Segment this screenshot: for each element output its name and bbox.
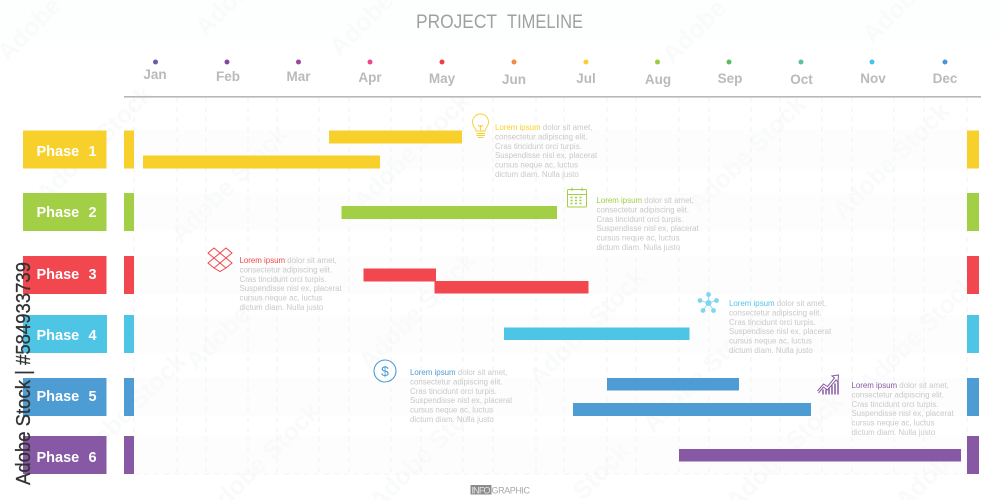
text: Adobe Stock xyxy=(180,247,308,375)
phase 2 row xyxy=(23,193,979,231)
text: Adobe Stock xyxy=(347,87,475,215)
text: phase 6 note: Lorem ipsum xyxy=(852,381,898,390)
phase 2 row: Phase xyxy=(36,205,79,221)
text: Adobe Stock xyxy=(683,90,811,218)
text: Adobe Stock xyxy=(30,80,158,208)
text: phase 6 note: Cras tincidunt orci turpis. xyxy=(852,400,938,409)
title xyxy=(416,12,583,33)
text: Adobe Stock xyxy=(853,270,981,398)
icon: light bulb xyxy=(472,114,488,138)
text: Adobe Stock xyxy=(353,247,481,375)
text: phase 3 note: cursus neque ac, luctus xyxy=(240,294,322,303)
month header xyxy=(143,60,958,87)
text: phase 6 note: Suspendisse nisl ex, placerat xyxy=(852,409,955,418)
text: phase 4 note: dolor sit amet, xyxy=(775,299,826,308)
text: phase 6 note: cursus neque ac, luctus xyxy=(852,419,934,428)
text: Adobe Stock xyxy=(63,347,191,475)
title: TIMELINE xyxy=(507,12,583,33)
text: phase 1 note: cursus neque ac, luctus xyxy=(495,161,578,170)
text: phase 3 note: Cras tincidunt orci turpis. xyxy=(240,275,326,284)
text: phase 5 note: Suspendisse nisl ex, placerat xyxy=(410,396,513,405)
month header: Nov xyxy=(860,71,886,86)
stock id vertical text: Adobe Stock | #584933739 xyxy=(13,262,35,485)
month header: May xyxy=(429,71,456,86)
text: phase 6 note: dolor sit amet, xyxy=(897,381,949,390)
phase 3 row xyxy=(23,256,979,294)
month header: Jan xyxy=(143,67,167,82)
icon: dollar coin xyxy=(374,360,396,382)
icon: growth chart xyxy=(818,375,838,394)
phase 6 row: Phase xyxy=(36,450,79,466)
footer logo xyxy=(470,485,530,496)
text: phase 4 note: Suspendisse nisl ex, placerat xyxy=(729,327,832,336)
text: phase 3 note: dolor sit amet, xyxy=(285,256,337,265)
icon: network xyxy=(698,292,718,312)
text: phase 2 note: dolor sit amet, xyxy=(642,196,694,205)
text: phase 3 note: Suspendisse nisl ex, placerat xyxy=(240,284,343,293)
text: phase 1 note: dolor sit amet, xyxy=(541,123,592,132)
text: Adobe Stock xyxy=(523,263,651,391)
phase 2 row: 2 xyxy=(88,205,97,221)
text: Adobe Stock xyxy=(637,310,765,438)
text: phase 5 note: dolor sit amet, xyxy=(456,368,507,377)
month header: Dec xyxy=(933,71,958,86)
text: phase 5 note: cursus neque ac, luctus xyxy=(410,406,493,415)
text: phase 5 note: dictum diam. Nulla justo xyxy=(410,415,494,424)
phase 3 row: Phase xyxy=(36,267,79,283)
month header: Feb xyxy=(216,69,240,84)
text: phase 2 note: Lorem ipsum xyxy=(596,196,643,205)
axis line xyxy=(124,96,981,98)
month header: Mar xyxy=(286,69,311,84)
icon: dollar coin: $ xyxy=(381,363,389,379)
text: phase 2 note: Cras tincidunt orci turpis. xyxy=(596,215,683,224)
text: phase 1 note: Suspendisse nisl ex, placerat xyxy=(495,151,598,160)
phase 1 row xyxy=(23,130,979,168)
phase 1 row: Phase xyxy=(36,144,79,160)
text: phase 1 note: Lorem ipsum xyxy=(495,123,541,132)
text: phase 2 note: consectetur adipiscing elit. xyxy=(596,205,689,214)
text: phase 1 note: consectetur adipiscing elit. xyxy=(495,132,588,141)
text: phase 3 note: dictum diam. Nulla justo xyxy=(240,303,324,312)
text: phase 2 note: Suspendisse nisl ex, placerat xyxy=(596,224,700,233)
text: phase 2 note: dictum diam. Nulla justo xyxy=(596,243,681,252)
phase 3 row: 3 xyxy=(88,267,97,283)
text: phase 4 note: Lorem ipsum xyxy=(729,299,775,308)
text: phase 5 note: consectetur adipiscing elit. xyxy=(410,377,503,386)
month header: Oct xyxy=(790,72,813,87)
text: phase 5 note: Lorem ipsum xyxy=(410,368,456,377)
phase 1 row: 1 xyxy=(88,144,97,160)
icon: calendar xyxy=(568,188,586,207)
text: phase 6 note: consectetur adipiscing elit. xyxy=(852,390,944,399)
text: phase 6 note: dictum diam. Nulla justo xyxy=(852,428,936,437)
text: phase 3 note: Lorem ipsum xyxy=(240,256,286,265)
text: phase 3 note: consectetur adipiscing elit. xyxy=(240,265,332,274)
footer logo: INFO xyxy=(472,486,490,496)
text: phase 4 note: Cras tincidunt orci turpis. xyxy=(729,318,816,327)
phase 4 row: 4 xyxy=(88,328,97,344)
phase 6 row: 6 xyxy=(88,450,97,466)
text: phase 4 note: consectetur adipiscing elit. xyxy=(729,308,822,317)
phase 6 row xyxy=(23,436,979,474)
phase 5 row xyxy=(23,378,979,416)
text: phase 4 note: dictum diam. Nulla justo xyxy=(729,346,813,355)
phase 4 row: Phase xyxy=(36,328,79,344)
footer logo: GRAPHIC xyxy=(492,486,530,496)
text: phase 1 note: Cras tincidunt orci turpis. xyxy=(495,142,582,151)
text: phase 5 note: Cras tincidunt orci turpis. xyxy=(410,387,497,396)
month header: Sep xyxy=(718,71,742,86)
text: phase 4 note: cursus neque ac, luctus xyxy=(729,337,812,346)
phase 5 row: 5 xyxy=(88,389,97,405)
month header: Aug xyxy=(645,72,671,87)
text: Adobe Stock xyxy=(165,120,293,248)
text: Adobe Stock xyxy=(827,97,955,225)
month header: Apr xyxy=(358,70,382,85)
text: phase 1 note: dictum diam. Nulla justo xyxy=(495,170,579,179)
text: phase 2 note: cursus neque ac, luctus xyxy=(596,234,679,243)
month header: Jul xyxy=(576,71,596,86)
month header: Jun xyxy=(502,72,526,87)
phase 5 row: Phase xyxy=(36,389,79,405)
title: PROJECT xyxy=(416,12,497,33)
phase 4 row xyxy=(23,315,979,353)
icon: layered diamonds xyxy=(208,248,232,272)
